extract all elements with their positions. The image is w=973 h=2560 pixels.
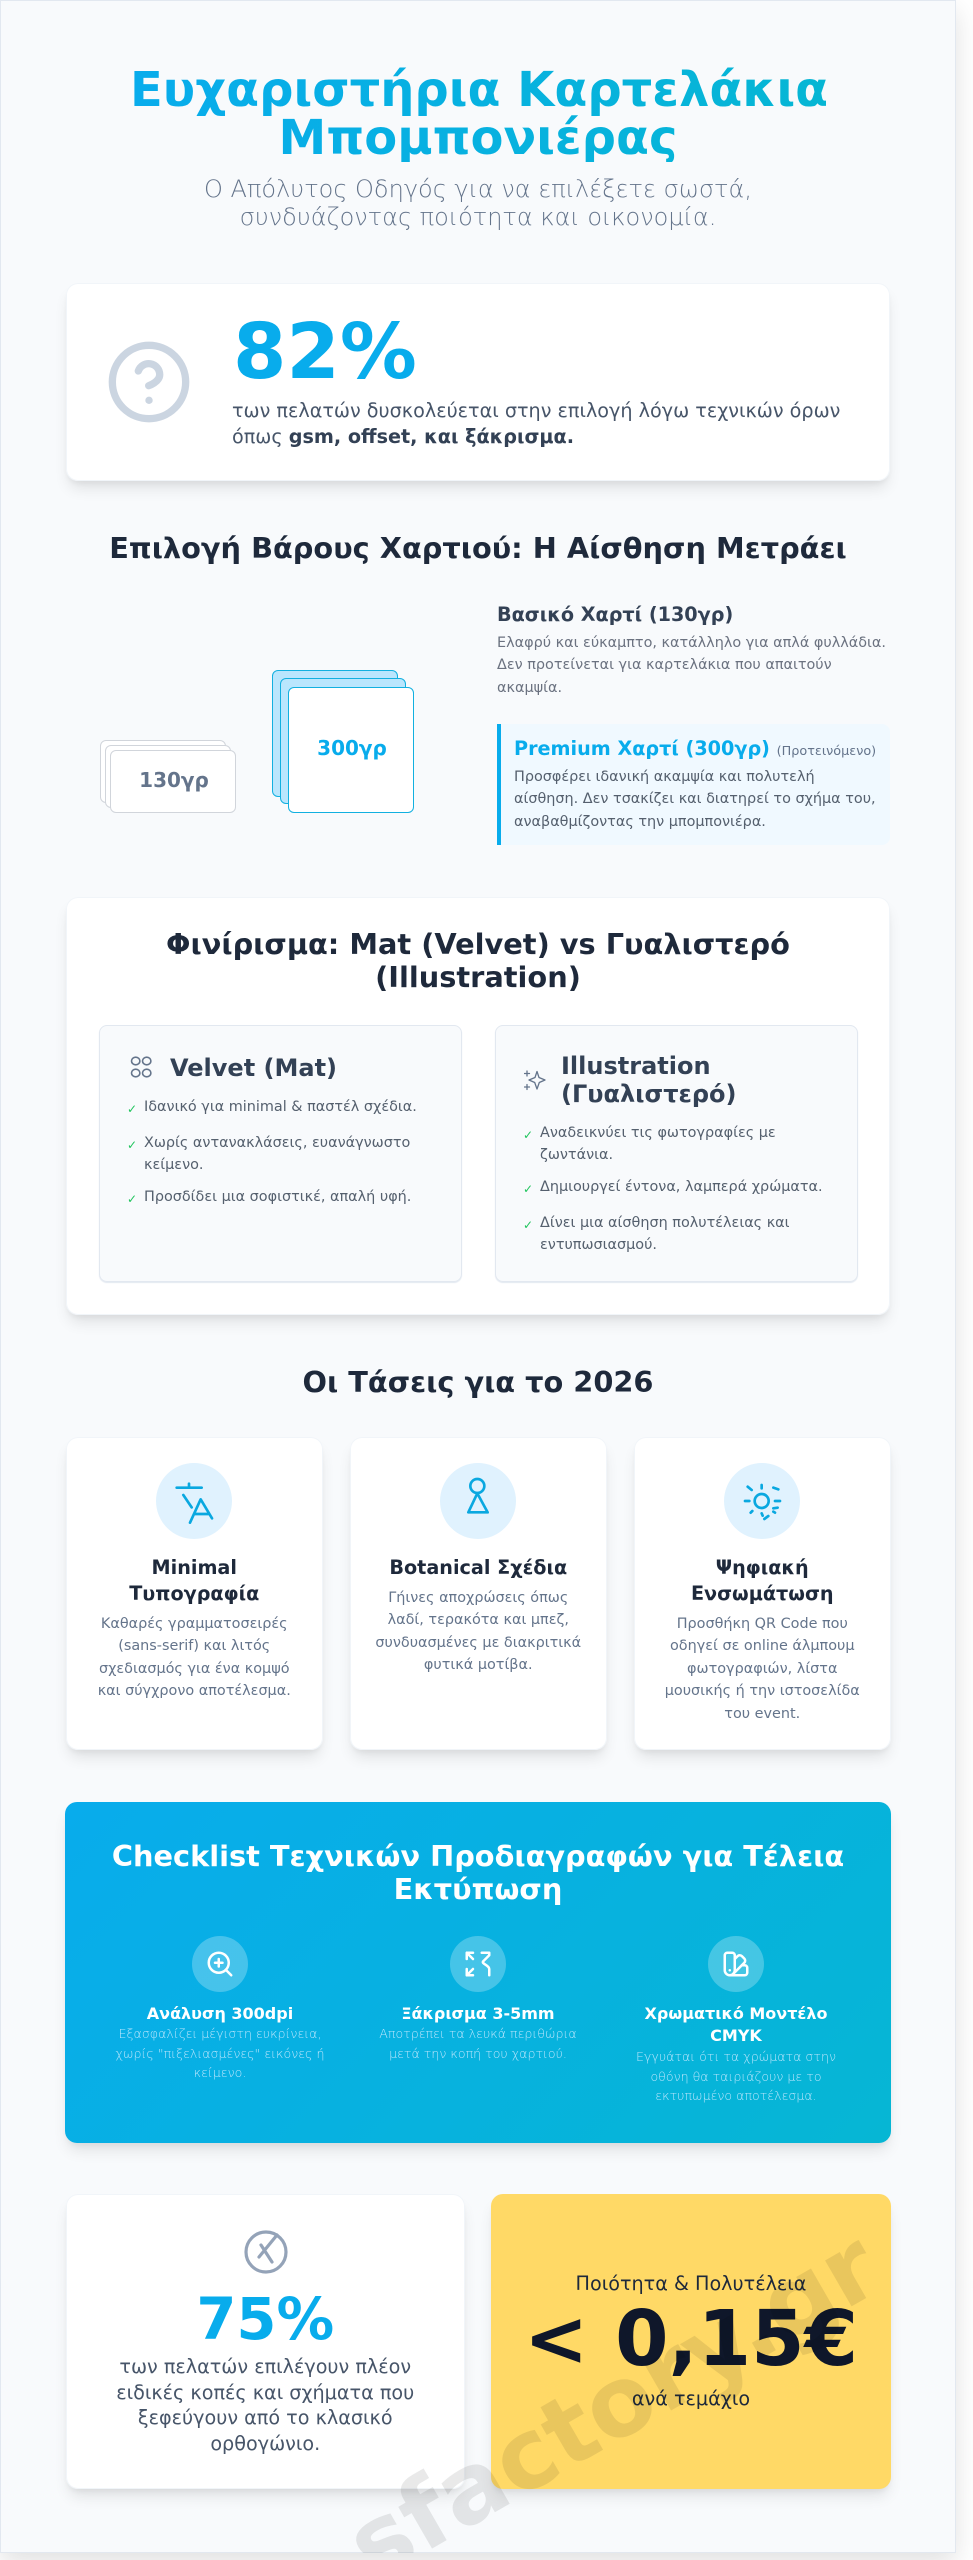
chart: paper stacks comparison bbox=[100, 670, 414, 813]
basic paper description: Ελαφρύ και εύκαμπτο, κατάλληλο για απλά φυλλάδια. bbox=[497, 634, 886, 650]
heading: trends: Οι Τάσεις για το 2026 bbox=[303, 1365, 653, 1399]
statistic description: όπως gsm, offset, και ξάκρισμα. bbox=[232, 425, 574, 448]
velvet list: Προσδίδει μια σοφιστικέ, απαλή υφή. bbox=[144, 1189, 411, 1205]
illustration heading bbox=[561, 1052, 736, 1108]
trend text: του event. bbox=[724, 1706, 800, 1722]
heading: finish bbox=[166, 926, 790, 994]
illustration list: Δημιουργεί έντονα, λαμπερά χρώματα. bbox=[540, 1179, 823, 1195]
panel: 75% statistic bbox=[66, 2194, 464, 2489]
heading: checklist: Εκτύπωση bbox=[394, 1872, 562, 1906]
premium description: αναβαθμίζοντας την μπομπονιέρα. bbox=[514, 814, 766, 830]
trend title: Minimal bbox=[152, 1556, 237, 1579]
statistic description: ειδικές κοπές και σχήματα που bbox=[116, 2380, 414, 2404]
checklist text: μετά την κοπή του χαρτιού. bbox=[389, 2046, 567, 2061]
statistic description: των πελατών δυσκολεύεται στην επιλογή λόγω τεχνικών όρων bbox=[232, 399, 840, 422]
premium description: αίσθηση. Δεν τσακίζει και διατηρεί το σχήμα του, bbox=[514, 791, 876, 807]
icon: crossed circle bbox=[244, 2230, 288, 2274]
panel: 82% statistic bbox=[66, 283, 890, 481]
icon: sun bbox=[744, 1484, 782, 1520]
velvet heading: Velvet (Mat) bbox=[170, 1054, 337, 1082]
illustration list: εντυπωσιασμού. bbox=[540, 1237, 657, 1253]
checklist text: Εγγυάται ότι τα χρώματα στην bbox=[636, 2049, 836, 2064]
trend text bbox=[375, 1590, 581, 1673]
velvet list: ✓ bbox=[127, 1102, 137, 1116]
trend title bbox=[691, 1556, 834, 1605]
velvet list: Χωρίς αντανακλάσεις, ευανάγνωστο bbox=[144, 1135, 410, 1151]
trend title bbox=[129, 1556, 259, 1605]
trend text: σχεδιασμός για ένα κομψό bbox=[99, 1661, 290, 1677]
trend text: μουσικής ή την ιστοσελίδα bbox=[665, 1683, 860, 1699]
velvet list bbox=[127, 1099, 417, 1206]
checklist text: κείμενο. bbox=[194, 2065, 246, 2080]
trend text: (sans-serif) και λιτός bbox=[118, 1638, 270, 1654]
trend title: Ενσωμάτωση bbox=[691, 1582, 834, 1605]
checklist text: Εξασφαλίζει μέγιστη ευκρίνεια, bbox=[119, 2026, 321, 2041]
panel: velvet bbox=[99, 1025, 462, 1282]
icon badge bbox=[192, 1936, 248, 1992]
statistic description bbox=[232, 399, 840, 448]
panel: technical checklist bbox=[65, 1802, 891, 2143]
price label: Ποιότητα & Πολυτέλεια bbox=[576, 2272, 806, 2295]
checklist title: Χρωματικό Μοντέλο bbox=[645, 2004, 827, 2023]
premium description bbox=[514, 768, 876, 830]
illustration list bbox=[523, 1125, 823, 1253]
premium description: Προσφέρει ιδανική ακαμψία και πολυτελή bbox=[514, 768, 815, 784]
icon badge bbox=[156, 1463, 232, 1539]
checklist text: οθόνη θα ταιριάζουν με το bbox=[650, 2069, 822, 2084]
trend text: συνδυασμένες με διακριτικά bbox=[375, 1635, 581, 1651]
velvet list: ✓ bbox=[127, 1138, 137, 1152]
trend text bbox=[98, 1616, 291, 1699]
illustration heading: (Γυαλιστερό) bbox=[561, 1080, 736, 1108]
velvet list: κείμενο. bbox=[144, 1157, 203, 1173]
premium heading: Premium Χαρτί (300γρ) (Προτεινόμενο) bbox=[514, 737, 876, 760]
price unit: ανά τεμάχιο bbox=[632, 2387, 750, 2410]
trend text: λαδί, τερακότα και μπεζ, bbox=[388, 1612, 569, 1628]
illustration list: ✓ bbox=[523, 1128, 533, 1142]
basic paper description: Δεν προτείνεται για καρτελάκια που απαιτούν bbox=[497, 657, 832, 673]
trend text: φωτογραφιών, λίστα bbox=[687, 1661, 837, 1677]
statistic description: ορθογώνιο. bbox=[210, 2432, 320, 2454]
trend text: φυτικά μοτίβα. bbox=[424, 1657, 533, 1673]
trend text: Προσθήκη QR Code που bbox=[677, 1616, 848, 1632]
illustration list: ✓ bbox=[523, 1182, 533, 1196]
130gsm stack: 130γρ bbox=[139, 768, 209, 792]
panel: botanical designs bbox=[350, 1437, 606, 1750]
trend text bbox=[665, 1616, 860, 1722]
statistic description bbox=[116, 2355, 414, 2454]
300gsm stack bbox=[272, 670, 414, 813]
panel: finish comparison bbox=[66, 897, 890, 1315]
checklist title bbox=[644, 2004, 827, 2045]
checklist text: χωρίς "πιξελιασμένες" εικόνες ή bbox=[116, 2046, 324, 2061]
title: Ευχαριστήρια Καρτελάκια bbox=[130, 62, 828, 118]
icon badge bbox=[708, 1936, 764, 1992]
illustration list: ✓ bbox=[523, 1218, 533, 1232]
trend title: Τυπογραφία bbox=[129, 1582, 259, 1605]
icon: sparkles bbox=[524, 1070, 546, 1090]
subtitle: συνδυάζοντας ποιότητα και οικονομία. bbox=[240, 203, 716, 231]
heading: checklist bbox=[112, 1838, 844, 1906]
illustration list: Αναδεικνύει τις φωτογραφίες με bbox=[540, 1125, 776, 1141]
basic paper description bbox=[497, 634, 886, 696]
basic paper heading: Βασικό Χαρτί (130γρ) bbox=[497, 603, 733, 626]
icon badge bbox=[724, 1463, 800, 1539]
130gsm stack bbox=[100, 740, 236, 813]
velvet list: ✓ bbox=[127, 1192, 137, 1206]
icon: swatch book bbox=[724, 1952, 748, 1976]
300gsm stack: 300γρ bbox=[317, 736, 387, 760]
icon: question mark bbox=[108, 342, 190, 422]
icon: language bbox=[175, 1482, 214, 1524]
checklist text bbox=[116, 2026, 324, 2080]
trend title: Botanical Σχέδια bbox=[389, 1556, 567, 1579]
checklist title: Ξάκρισμα 3-5mm bbox=[401, 2004, 555, 2023]
velvet list: Ιδανικό για minimal & παστέλ σχέδια. bbox=[144, 1099, 417, 1115]
subtitle bbox=[204, 175, 752, 231]
trend title: Ψηφιακή bbox=[716, 1556, 809, 1579]
illustration list: Δίνει μια αίσθηση πολυτέλειας και bbox=[540, 1215, 790, 1231]
illustration list: ζωντάνια. bbox=[540, 1147, 613, 1163]
panel: minimal typography bbox=[66, 1437, 322, 1750]
trend text: Καθαρές γραμματοσειρές bbox=[101, 1616, 288, 1632]
icon: velvet grid bbox=[130, 1056, 152, 1078]
checklist title: Ανάλυση 300dpi bbox=[147, 2004, 293, 2023]
text block: basic paper bbox=[497, 603, 886, 696]
basic paper description: ακαμψία. bbox=[497, 680, 562, 696]
icon badge bbox=[450, 1936, 506, 1992]
statistic number: 75% bbox=[196, 2286, 334, 2353]
heading: finish: (Illustration) bbox=[375, 960, 581, 994]
icon: botanical bbox=[467, 1478, 489, 1514]
checklist title: CMYK bbox=[710, 2026, 762, 2045]
trend text: και σύγχρονο αποτέλεσμα. bbox=[98, 1683, 291, 1699]
panel: digital integration bbox=[634, 1437, 890, 1750]
icon badge bbox=[440, 1463, 516, 1539]
subtitle: Ο Απόλυτος Οδηγός για να επιλέξετε σωστά, bbox=[204, 175, 752, 203]
illustration heading: Illustration bbox=[561, 1052, 711, 1080]
title bbox=[130, 66, 826, 162]
panel: price bbox=[491, 2194, 891, 2489]
trend text: οδηγεί σε online άλμπουμ bbox=[670, 1638, 855, 1654]
title: Μπομπονιέρας bbox=[279, 110, 677, 166]
checklist text bbox=[379, 2026, 577, 2061]
price value: < 0,15€ bbox=[524, 2295, 858, 2384]
heading: paper weight: Επιλογή Βάρους Χαρτιού: Η Αίσθηση Μετράει bbox=[109, 531, 847, 565]
statistic number: 82% bbox=[233, 308, 417, 397]
statistic description: ξεφεύγουν από το κλασικό bbox=[138, 2406, 393, 2429]
icon: bleed arrows bbox=[466, 1951, 490, 1977]
panel: illustration bbox=[495, 1025, 858, 1282]
trend text: Γήινες αποχρώσεις όπως bbox=[388, 1590, 568, 1606]
checklist text: εκτυπωμένο αποτέλεσμα. bbox=[655, 2088, 817, 2103]
callout: premium paper bbox=[497, 724, 890, 845]
heading: finish: Φινίρισμα: Mat (Velvet) vs Γυαλιστερό bbox=[166, 926, 790, 960]
checklist text: Αποτρέπει τα λευκά περιθώρια bbox=[379, 2026, 577, 2041]
icon: zoom bbox=[208, 1952, 232, 1977]
statistic description: των πελατών επιλέγουν πλέον bbox=[119, 2355, 411, 2378]
heading: checklist: Checklist Τεχνικών Προδιαγραφών για Τέλεια bbox=[112, 1838, 844, 1872]
checklist text bbox=[636, 2049, 836, 2103]
